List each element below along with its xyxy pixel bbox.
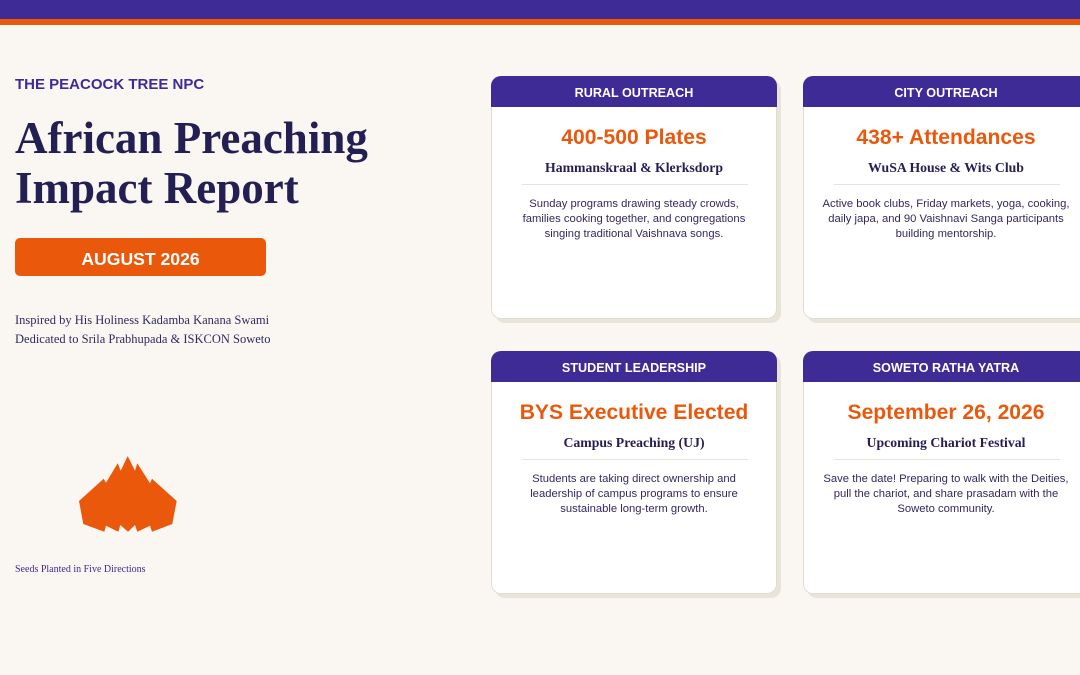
panel: student leadership: BYS Executive Elected <box>520 401 748 424</box>
panel: soweto ratha yatra: Soweto community. <box>897 503 995 515</box>
icon: lotus <box>79 456 177 532</box>
panel: rural outreach: Hammanskraal & Klerksdorp <box>545 160 723 175</box>
panel: student leadership <box>491 351 777 594</box>
top banner <box>0 0 1080 25</box>
panel: rural outreach: singing traditional Vaishnava songs. <box>545 228 723 240</box>
panel: student leadership: sustainable long-term growth. <box>560 503 708 515</box>
date badge: AUGUST 2026 <box>81 249 200 269</box>
panel: student leadership: Campus Preaching (UJ) <box>563 435 705 450</box>
panel: rural outreach: Sunday programs drawing steady crowds, <box>529 198 739 210</box>
panel: soweto ratha yatra: September 26, 2026 <box>848 401 1044 424</box>
panel: soweto ratha yatra: Save the date! Preparing to walk with the Deities, <box>823 473 1069 485</box>
panel: city outreach: 438+ Attendances <box>856 126 1036 149</box>
panel: city outreach: WuSA House & Wits Club <box>868 160 1024 175</box>
panel: rural outreach <box>491 76 777 319</box>
title <box>15 113 368 213</box>
date badge <box>15 238 266 276</box>
panel: city outreach: Active book clubs, Friday markets, yoga, cooking, <box>822 198 1069 210</box>
dedication text: Dedicated to Srila Prabhupada & ISKCON Soweto <box>15 332 271 346</box>
panel: rural outreach: families cooking together, and congregations <box>523 213 745 225</box>
panel: rural outreach: 400-500 Plates <box>561 126 707 149</box>
dedication text: Inspired by His Holiness Kadamba Kanana Swami <box>15 313 269 327</box>
panel: soweto ratha yatra <box>803 351 1080 594</box>
panel: city outreach: building mentorship. <box>896 228 996 240</box>
dedication text <box>15 313 271 346</box>
panel: student leadership: leadership of campus programs to ensure <box>530 488 738 500</box>
panel: student leadership: STUDENT LEADERSHIP <box>562 361 706 375</box>
panel: soweto ratha yatra: SOWETO RATHA YATRA <box>873 361 1019 375</box>
title: Impact Report <box>15 163 299 213</box>
panel: city outreach: daily japa, and 90 Vaishnavi Sanga participants <box>828 213 1064 225</box>
organisation name: THE PEACOCK TREE NPC <box>15 76 204 93</box>
panel: soweto ratha yatra: Upcoming Chariot Festival <box>867 435 1025 450</box>
lotus caption: Seeds Planted in Five Directions <box>15 564 146 575</box>
title: African Preaching <box>15 113 368 163</box>
panel: student leadership: Students are taking direct ownership and <box>532 473 736 485</box>
panel: city outreach: CITY OUTREACH <box>894 86 998 100</box>
panel: rural outreach: RURAL OUTREACH <box>575 86 693 100</box>
panel: city outreach <box>803 76 1080 319</box>
panel: soweto ratha yatra: pull the chariot, and share prasadam with the <box>834 488 1058 500</box>
